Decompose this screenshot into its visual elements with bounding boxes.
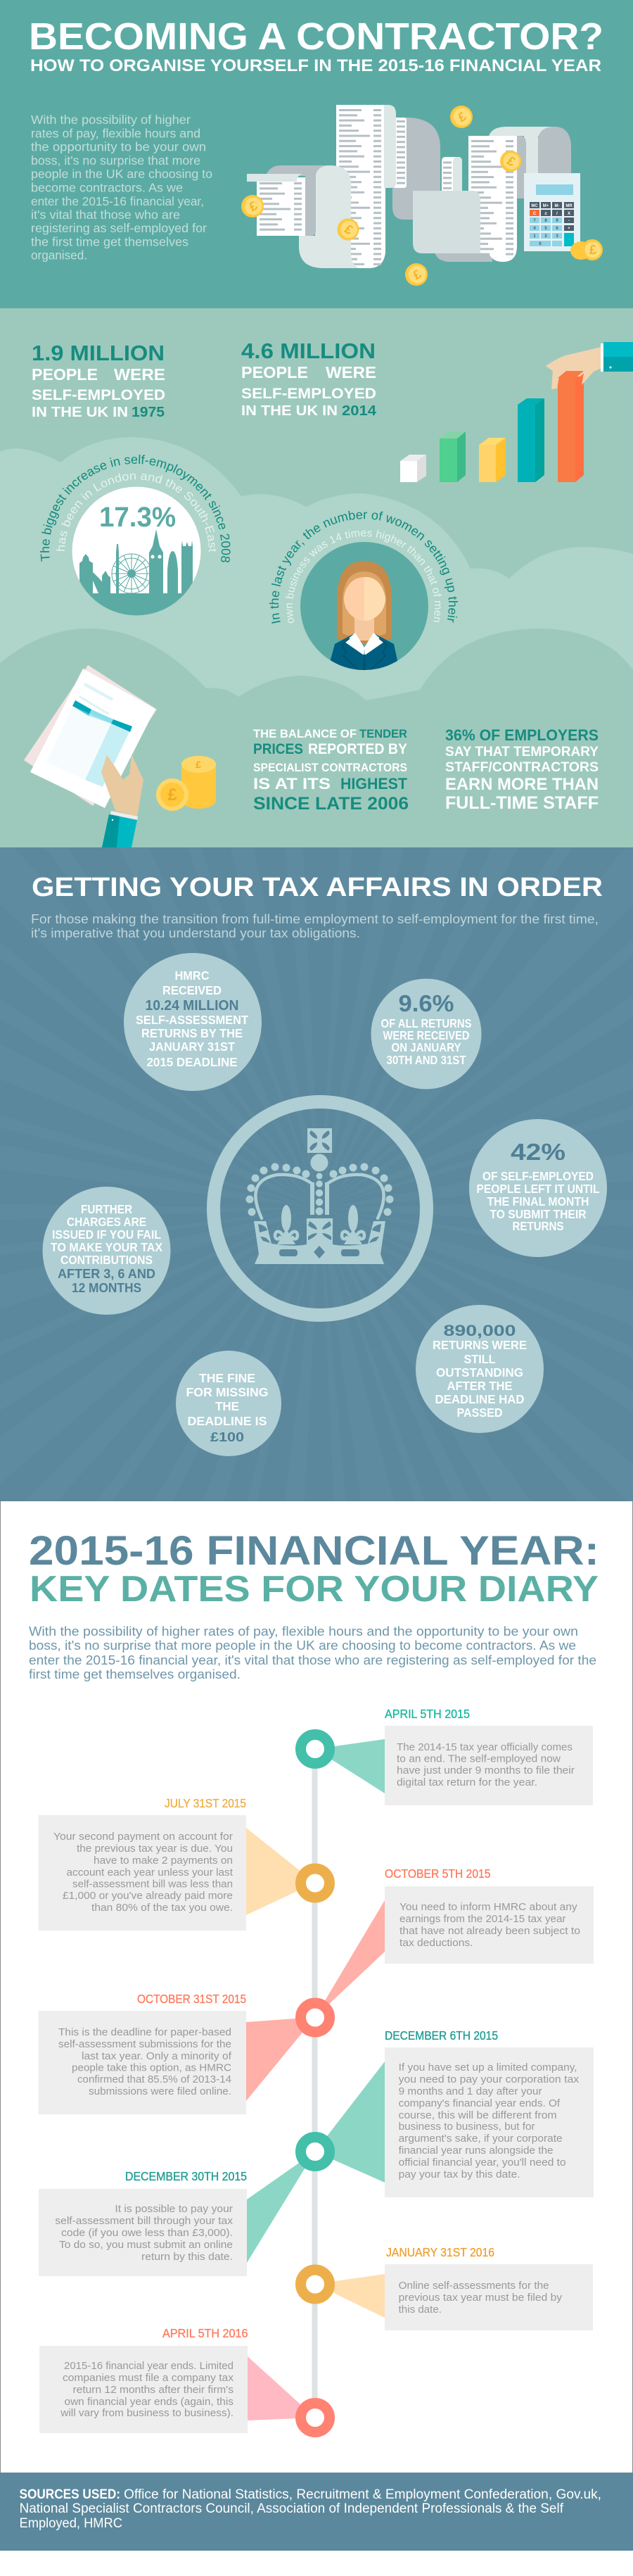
intro text: first time get themselves organised. — [29, 1667, 241, 1681]
date: April 5th 2015: The 2014-15 tax year officially comes — [397, 1742, 573, 1753]
intro text: With the possibility of higher — [31, 113, 191, 127]
date: October 31st 2015: submissions were filed online. — [89, 2086, 231, 2097]
date: July 31st 2015 — [38, 1796, 246, 1931]
bubble: further charges: 12 MONTHS — [72, 1281, 141, 1295]
background cloud dark — [0, 629, 633, 847]
intro text — [31, 113, 212, 263]
bubble: 42%: 42% — [511, 1139, 565, 1165]
bubble: 9.6%: 30TH AND 31ST — [387, 1053, 466, 1067]
illustration: receipts, coins and calculator: 9 — [556, 219, 558, 223]
date: December 30th 2015: return by this date. — [141, 2252, 233, 2263]
illustration: receipts, coins and calculator: X — [568, 212, 570, 216]
illustration: receipts, coins and calculator: C — [533, 212, 537, 216]
subheading: KEY DATES FOR YOUR DIARY — [30, 1569, 599, 1610]
intro text: it's imperative that you understand your tax obligations. — [31, 926, 360, 940]
date: April 5th 2015: APRIL 5TH 2015 — [385, 1707, 470, 1721]
bubble: 890,000: OUTSTANDING — [436, 1365, 523, 1379]
bubble: 10.24 million returns: 10.24 MILLION — [145, 998, 239, 1014]
stat: 4.6 million: WERE — [326, 363, 376, 381]
timeline connectors — [246, 1739, 385, 2420]
date: July 31st 2015: £1,000 or you've already paid more — [63, 1890, 233, 1902]
stat: 1.9 million: 1.9 MILLION — [32, 341, 165, 365]
bubble: 10.24 million returns — [124, 953, 262, 1091]
bubble: further charges — [42, 1187, 170, 1315]
date: July 31st 2015: account each year unless your last — [66, 1867, 233, 1879]
stat: 4.6 million — [241, 339, 377, 419]
date: October 5th 2015: earnings from the 2014-15 tax year — [399, 1914, 566, 1925]
date: December 6th 2015: pay your tax by this date. — [399, 2169, 520, 2180]
heading: 2015-16 FINANCIAL YEAR: — [29, 1528, 599, 1574]
date: October 5th 2015: that have not already been subject to — [399, 1926, 580, 1937]
illustration: receipts, coins and calculator: 7 — [533, 219, 536, 223]
stat: tender prices: IS AT ITS — [253, 775, 331, 793]
bubble: 42%: OF SELF-EMPLOYED — [482, 1169, 594, 1183]
stat: employers: EARN MORE THAN — [445, 775, 599, 794]
date: October 31st 2015: OCTOBER 31ST 2015 — [137, 1992, 246, 2006]
illustration: receipts, coins and calculator: 0 — [539, 242, 542, 246]
illustration: receipts, coins and calculator: - — [568, 219, 570, 223]
intro text: For those making the transition from full-time employment to self-employment for the first time, — [31, 912, 599, 926]
illustration: receipts, coins and calculator: 1 — [533, 234, 536, 239]
stat: tender prices: SPECIALIST CONTRACTORS — [253, 761, 407, 774]
stat: employers: STAFF/CONTRACTORS — [445, 760, 599, 775]
circular London skyline — [72, 487, 201, 615]
date: July 31st 2015: self-assessment bill was less than — [72, 1879, 233, 1890]
bar chart with hand — [400, 342, 633, 482]
date: July 31st 2015: than 80% of the tax you owe. — [91, 1902, 233, 1914]
intro text: rates of pay, flexible hours and — [31, 126, 200, 140]
date: October 31st 2015: self-assessment submissions for the — [58, 2039, 231, 2050]
date: October 5th 2015: OCTOBER 5TH 2015 — [385, 1867, 491, 1881]
bubble: 890,000: DEADLINE HAD — [435, 1392, 525, 1406]
date: December 30th 2015: To do so, you must submit an online — [59, 2240, 233, 2251]
stat: tender prices — [253, 727, 409, 814]
heading: GETTING YOUR TAX AFFAIRS IN ORDER — [32, 873, 603, 902]
date: December 30th 2015: It is possible to pay your — [115, 2204, 233, 2215]
date: April 5th 2016: APRIL 5TH 2016 — [162, 2326, 248, 2340]
date: December 6th 2015: company's financial year ends. Of — [399, 2098, 561, 2109]
bubble: 10.24 million returns: JANUARY 31ST — [149, 1040, 235, 1054]
bubble: 890,000: STILL — [464, 1352, 496, 1366]
intro text: enter the 2015-16 financial year, it's vital that those who are registering as self-employed for the — [29, 1653, 596, 1667]
bubble: further charges: TO MAKE YOUR TAX — [51, 1240, 162, 1254]
subtitle: HOW TO ORGANISE YOURSELF IN THE 2015-16 FINANCIAL YEAR — [30, 56, 601, 75]
background cloud light — [0, 437, 633, 704]
bubble: further charges: AFTER 3, 6 AND — [58, 1267, 155, 1281]
date: December 6th 2015: argument's sake, if your corporate — [399, 2133, 563, 2145]
date: October 31st 2015: last tax year. Only a minority of — [82, 2051, 232, 2062]
bubble: 890,000: RETURNS WERE — [433, 1338, 527, 1352]
date: December 30th 2015: DECEMBER 30TH 2015 — [125, 2169, 247, 2183]
illustration: receipts, coins and calculator: £ — [505, 153, 518, 169]
bubble: 10.24 million returns: HMRC — [174, 968, 210, 983]
stat: tender prices: TENDER — [359, 727, 407, 740]
illustration: receipts, coins and calculator: / — [556, 212, 558, 216]
illustration: receipts, coins and calculator: 6 — [556, 227, 558, 231]
date: December 6th 2015: 9 months and 1 day after your — [399, 2086, 542, 2097]
icon: coin stack: £ — [196, 759, 201, 770]
bubble: 9.6%: WERE RECEIVED — [383, 1028, 470, 1042]
stat: 1.9 million: IN THE UK IN — [32, 404, 128, 420]
stat: employers — [445, 726, 599, 813]
stat: tender prices: PRICES — [253, 741, 303, 757]
bubble: 10.24 million returns: 2015 DEADLINE — [146, 1055, 238, 1069]
figure 17.3%: 17.3% — [99, 502, 176, 533]
stat: tender prices: HIGHEST — [340, 775, 408, 793]
illustration: receipts, coins and calculator: MR — [565, 204, 573, 208]
stat: 1.9 million: WERE — [114, 365, 165, 384]
panel: sources: Office for National Statistics, Recruitment & Employment Confederation, Gov.uk, — [124, 2487, 601, 2502]
stat: tender prices: SINCE LATE 2006 — [253, 794, 409, 814]
illustration: receipts, coins and calculator: £ — [456, 109, 468, 125]
illustration: receipts, coins and calculator: £ — [589, 243, 596, 257]
intro text: the first time get themselves — [31, 234, 188, 248]
date: December 6th 2015: official financial year, you'll need to — [399, 2157, 566, 2168]
bubble: further charges: CONTRIBUTIONS — [60, 1253, 153, 1267]
intro text: people in the UK are choosing to — [31, 167, 212, 181]
intro text: enter the 2015-16 financial year, — [31, 194, 204, 208]
stat: employers: SAY THAT TEMPORARY — [445, 745, 599, 759]
bubble: 9.6%: OF ALL RETURNS — [381, 1016, 471, 1030]
date: December 30th 2015: code (if you owe less than £3,000). — [61, 2228, 233, 2239]
date: January 31st 2016: JANUARY 31ST 2016 — [386, 2245, 494, 2259]
women statistic — [269, 511, 459, 670]
date: January 31st 2016: this date. — [399, 2304, 442, 2316]
date: July 31st 2015: the previous tax year is due. You — [77, 1843, 233, 1855]
date: January 31st 2016: Online self-assessments for the — [399, 2280, 549, 2292]
intro text: With the possibility of higher rates of pay, flexible hours and the opportunity to be your own — [29, 1624, 578, 1639]
intro text — [31, 912, 599, 940]
bubble: further charges: FURTHER — [81, 1202, 132, 1216]
date: December 6th 2015: course, this will be different from — [399, 2110, 557, 2121]
bubble: 42%: TO SUBMIT THEIR — [490, 1207, 587, 1221]
stat: tender prices: THE BALANCE OF — [253, 727, 357, 740]
bubble: 890,000: 890,000 — [443, 1322, 516, 1339]
bubble: fine: FOR MISSING — [186, 1385, 269, 1399]
date: January 31st 2016: previous tax year must be filed by — [399, 2292, 563, 2304]
bubble: 9.6%: 9.6% — [398, 990, 454, 1016]
illustration: receipts, coins and calculator: 2 — [544, 234, 547, 239]
stat: 4.6 million: PEOPLE — [241, 363, 308, 381]
illustration: receipts, coins and calculator: + — [568, 227, 570, 231]
bubble: further charges: ISSUED IF YOU FAIL — [52, 1227, 161, 1242]
panel: sources: Employed, HMRC — [20, 2516, 122, 2531]
bubble: 890,000 — [416, 1305, 544, 1433]
stat: employers: 36% OF EMPLOYERS — [445, 726, 599, 744]
date: April 5th 2016: will vary from business to business). — [60, 2408, 234, 2419]
curved caption: In the last year, the number of women setting up their — [269, 511, 459, 624]
date: December 6th 2015: financial year runs alongside the — [399, 2145, 554, 2157]
stat: employers: FULL-TIME STAFF — [445, 793, 599, 813]
bubble: 10.24 million returns: SELF-ASSESSMENT — [136, 1013, 248, 1027]
illustration: receipts, coins and calculator: MC — [531, 204, 538, 208]
intro text: it's vital that those who are — [31, 208, 180, 222]
intro text — [29, 1624, 596, 1681]
illustration: document in hand — [24, 665, 157, 847]
date: October 5th 2015: You need to inform HMRC about any — [399, 1902, 577, 1913]
date: July 31st 2015: Your second payment on account for — [53, 1831, 233, 1843]
illustration: receipts, coins and calculator — [241, 105, 603, 286]
date: April 5th 2016: own financial year ends (again, this — [65, 2397, 234, 2408]
bubble: fine: THE FINE — [199, 1371, 255, 1385]
bubble: fine — [176, 1351, 281, 1456]
date: January 31st 2016 — [385, 2245, 593, 2330]
curved caption: The biggest increase in self-employment since 2008 — [39, 455, 231, 562]
date: July 31st 2015: JULY 31ST 2015 — [165, 1796, 246, 1810]
stat: 1.9 million: PEOPLE — [32, 365, 98, 384]
intro text: organised. — [31, 248, 87, 263]
illustration: receipts, coins and calculator: 3 — [556, 234, 558, 239]
date: December 6th 2015 — [385, 2028, 594, 2197]
icon: coin stack: £ — [167, 785, 177, 804]
date: October 31st 2015: This is the deadline for paper-based — [58, 2027, 231, 2038]
portrait circle — [300, 542, 428, 676]
intro text: the opportunity to be your own — [31, 140, 206, 154]
bubble: 9.6%: ON JANUARY — [391, 1040, 461, 1054]
bubble: fine: THE — [215, 1399, 239, 1413]
stat: tender prices: REPORTED BY — [308, 741, 407, 757]
bubble: 42% — [469, 1119, 607, 1257]
intro text: boss, it's no surprise that more — [31, 153, 200, 168]
bubble: 9.6% — [371, 978, 481, 1090]
panel: key dates — [0, 1501, 633, 2473]
London statistic — [39, 455, 231, 615]
curved sub-caption: has been in London and the South-East — [56, 473, 217, 552]
intro text: boss, it's no surprise that more people in the UK are choosing to become contractors. As we — [29, 1638, 576, 1653]
date: December 30th 2015 — [39, 2169, 247, 2276]
illustration: receipts, coins and calculator: M+ — [543, 204, 549, 208]
panel: sources: National Specialist Contractors Council, Association of Independent Professionals & the Self — [20, 2501, 564, 2516]
bubble: 890,000: PASSED — [457, 1406, 502, 1420]
illustration: receipts, coins and calculator: 8 — [544, 219, 547, 223]
stat: 4.6 million: 2014 — [342, 403, 377, 419]
stat: 1.9 million — [32, 341, 165, 420]
date: July 31st 2015: have to make 2 payments on — [94, 1855, 233, 1867]
intro text: become contractors. As we — [31, 180, 183, 194]
title: BECOMING A CONTRACTOR? — [29, 15, 603, 58]
panel: tax affairs — [0, 847, 633, 1501]
stat: 4.6 million: 4.6 MILLION — [241, 339, 376, 363]
stat: 4.6 million: IN THE UK IN — [241, 403, 338, 419]
bubble: 10.24 million returns: RECEIVED — [162, 983, 222, 997]
illustration: receipts, coins and calculator: M- — [554, 204, 560, 208]
date: October 31st 2015 — [38, 1992, 246, 2114]
date: April 5th 2016: return 12 months after their firm's — [73, 2385, 234, 2396]
panel: sources: SOURCES USED: — [20, 2487, 120, 2502]
bubble: 42%: RETURNS — [512, 1219, 564, 1233]
bubble: 42%: THE FINAL MONTH — [487, 1194, 589, 1208]
bubble: 42%: PEOPLE LEFT IT UNTIL — [477, 1182, 600, 1196]
stat: 1.9 million: SELF-EMPLOYED — [32, 387, 165, 403]
stat: 4.6 million: SELF-EMPLOYED — [241, 386, 376, 402]
timeline markers — [301, 1734, 329, 2432]
date: April 5th 2015 — [385, 1707, 593, 1805]
panel: header and intro — [0, 0, 633, 308]
bubble: 890,000: AFTER THE — [447, 1379, 512, 1393]
panel: self-employment statistics — [0, 308, 633, 847]
icon: crown in ring — [214, 1102, 426, 1315]
date: December 6th 2015: you need to pay your corporation tax — [399, 2074, 580, 2085]
date: December 6th 2015: If you have set up a limited company, — [399, 2062, 577, 2073]
date: December 6th 2015: business to business, but for — [399, 2121, 535, 2133]
date: April 5th 2015: to an end. The self-employed now — [397, 1754, 561, 1765]
curved sub-caption: own business was 14 times higher than that of men — [286, 529, 442, 624]
date: April 5th 2016: companies must file a company tax — [63, 2373, 234, 2384]
illustration: receipts, coins and calculator: £ — [247, 198, 260, 214]
timeline line — [312, 1760, 318, 2407]
illustration: receipts, coins and calculator: £ — [411, 267, 423, 282]
illustration: receipts, coins and calculator: 5 — [544, 227, 547, 231]
date: April 5th 2015: have just under 9 months to file their — [397, 1765, 575, 1776]
date: December 30th 2015: self-assessment bill through your tax — [55, 2216, 234, 2227]
illustration: receipts, coins and calculator: 4 — [533, 227, 536, 231]
date: April 5th 2016: 2015-16 financial year ends. Limited — [64, 2361, 234, 2372]
date: December 6th 2015: DECEMBER 6TH 2015 — [385, 2028, 498, 2043]
bubble: 10.24 million returns: RETURNS BY THE — [141, 1026, 243, 1040]
stat: 1.9 million: 1975 — [132, 404, 165, 420]
illustration: receipts, coins and calculator: ± — [544, 212, 547, 216]
illustration: receipts, coins and calculator: £ — [343, 222, 355, 237]
icon: coin stack — [156, 756, 216, 811]
intro text: registering as self-employed for — [31, 221, 207, 235]
bubble: fine: £100 — [210, 1430, 244, 1444]
bubble: further charges: CHARGES ARE — [67, 1215, 146, 1229]
panel: sources — [0, 2473, 633, 2551]
bubble: fine: DEADLINE IS — [187, 1414, 267, 1428]
date: October 5th 2015: tax deductions. — [399, 1938, 473, 1949]
date: April 5th 2016 — [39, 2326, 248, 2433]
date: October 5th 2015 — [385, 1867, 594, 1964]
date: October 31st 2015: confirmed that 85.5% of 2013-14 — [77, 2074, 231, 2085]
date: October 31st 2015: people take this option, as HMRC — [72, 2062, 231, 2073]
date: April 5th 2015: digital tax return for the year. — [397, 1777, 537, 1788]
